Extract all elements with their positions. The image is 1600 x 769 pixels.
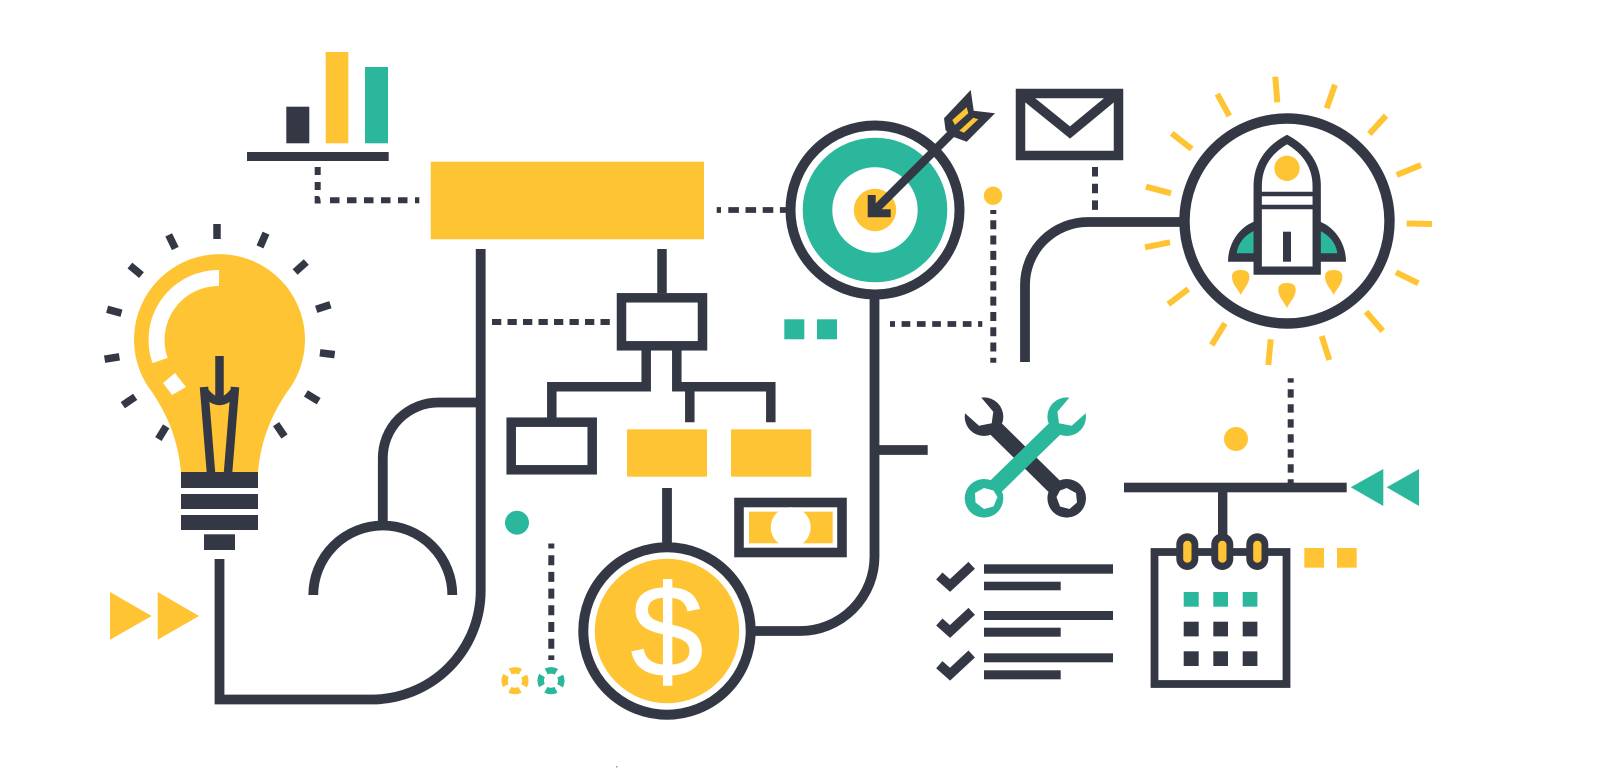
small teal ring [541, 670, 561, 691]
yellow dot [984, 186, 1002, 205]
filament [204, 356, 235, 473]
dotted connector: main line to org chart [492, 319, 612, 325]
dollar coin [583, 488, 751, 715]
dashed connector under envelope [1092, 167, 1098, 210]
light bulb icon [105, 224, 335, 550]
rocket body [1258, 140, 1317, 271]
checklist [939, 564, 1113, 679]
target rings [790, 126, 960, 294]
envelope icon [1020, 92, 1118, 156]
dollar sign: $ [631, 558, 703, 704]
teal squares [784, 319, 837, 339]
rocket fins [1228, 221, 1346, 262]
dotted connector: chart to banner [315, 167, 419, 204]
calendar day grid [1184, 592, 1257, 666]
badge ring [1184, 118, 1390, 324]
yellow dot above timeline [1224, 427, 1248, 451]
crossed wrenches icon [955, 390, 1096, 518]
bar chart icon [247, 52, 389, 161]
org chart [511, 249, 811, 477]
timeline bar [1124, 483, 1347, 535]
target with arrow [790, 90, 995, 294]
connector: coin to target [752, 295, 928, 631]
bulb highlight [157, 278, 219, 360]
banknote icon [739, 502, 842, 552]
dotted connector: banner to target [717, 207, 786, 213]
bulb base [181, 472, 258, 550]
dotted connector: rocket to timeline [1288, 378, 1294, 484]
arrow [868, 90, 995, 217]
main connector line from bulb [220, 249, 481, 700]
vertical dotted line [990, 210, 996, 363]
yellow forward arrows [110, 592, 199, 640]
teal dot [505, 511, 529, 535]
dotted connector to small rings [548, 544, 554, 660]
connector: envelope line to rocket [1025, 222, 1182, 362]
yellow squares [1304, 548, 1357, 568]
calendar icon [1154, 533, 1286, 684]
calendar rings [1176, 533, 1268, 570]
horizontal dotted line [890, 321, 982, 327]
bulb glass [134, 254, 305, 472]
semicircle branch [313, 402, 481, 595]
bulb rays [105, 224, 335, 439]
rocket badge [1145, 77, 1432, 365]
yellow banner [431, 162, 704, 239]
rocket rays [1145, 77, 1432, 365]
teal wrench [965, 390, 1096, 518]
rocket flames [1232, 270, 1342, 308]
teal rewind arrows [1351, 469, 1419, 506]
dark wrench [955, 390, 1086, 518]
small yellow ring [505, 670, 525, 691]
